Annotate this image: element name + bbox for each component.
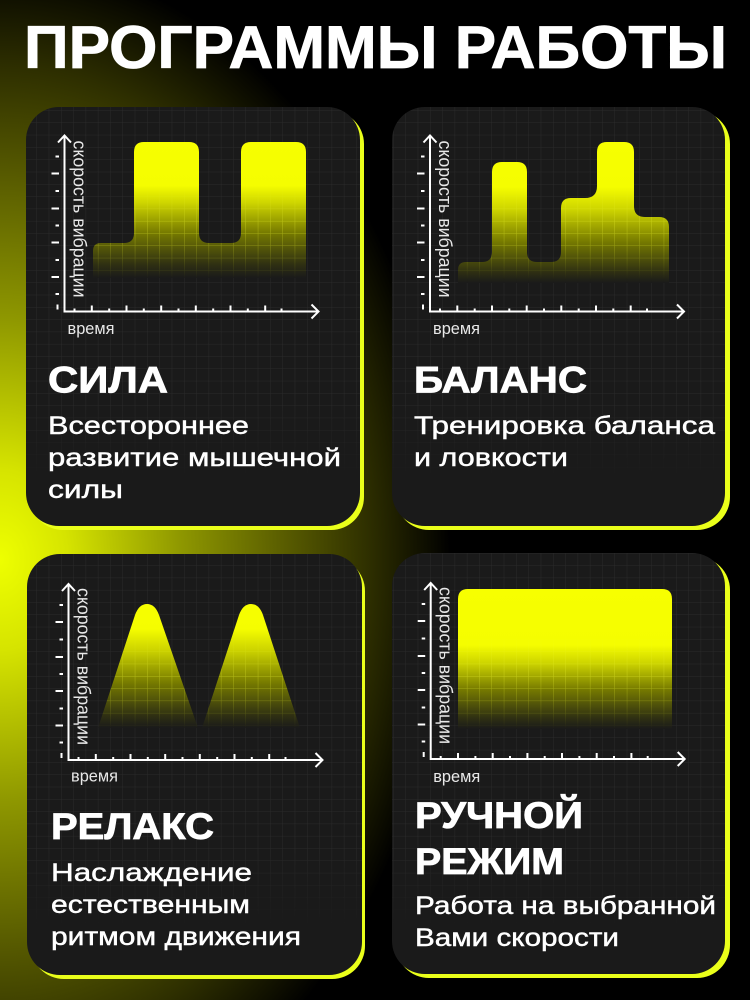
card background [27, 554, 362, 975]
title: ПРОГРАММЫ РАБОТЫ [24, 14, 727, 81]
axes: скорость вибрации [74, 588, 94, 745]
heading: РУЧНОЙ [415, 794, 583, 836]
heading: РЕЛАКС [51, 806, 214, 847]
panel: ручной режим [392, 553, 730, 978]
yellow card edge [396, 111, 730, 530]
card background [392, 553, 725, 974]
panel: сила [26, 107, 364, 530]
axes: скорость вибрации [435, 140, 456, 298]
chart: ручной режим program [458, 589, 672, 729]
panel: релакс [27, 554, 365, 979]
description: Тренировка баланса [414, 412, 715, 440]
panel: баланс [392, 107, 730, 530]
axes [52, 136, 318, 338]
axes: время [433, 767, 480, 786]
description: естественным [51, 891, 250, 919]
axes [417, 136, 684, 338]
axes [56, 584, 322, 786]
description: ритмом движения [51, 923, 301, 951]
yellow card edge [396, 557, 730, 978]
chart: сила program [93, 142, 306, 278]
chart: баланс program [458, 142, 669, 283]
description [48, 412, 341, 504]
description [414, 412, 715, 472]
description: Вами скорости [415, 924, 619, 952]
yellow card edge [31, 558, 365, 979]
axes: скорость вибрации [70, 140, 90, 298]
heading: СИЛА [48, 360, 168, 400]
description: Всестороннее [48, 412, 249, 440]
card background [26, 107, 360, 526]
description: развитие мышечной [48, 444, 341, 472]
description: силы [48, 476, 123, 504]
axes: скорость вибрации [436, 587, 457, 744]
description: Наслаждение [51, 859, 252, 887]
heading: БАЛАНС [414, 360, 587, 400]
description: Работа на выбранной [415, 892, 716, 920]
yellow card edge [30, 111, 364, 530]
axes: время [68, 319, 114, 338]
heading: РЕЖИМ [415, 841, 564, 882]
axes: время [433, 319, 480, 338]
axes [418, 583, 685, 786]
axes: время [71, 767, 118, 786]
description [51, 859, 301, 951]
chart: релакс program [98, 604, 300, 728]
heading [415, 794, 583, 882]
description: и ловкости [414, 444, 568, 472]
card background [392, 107, 725, 526]
description [415, 892, 716, 952]
